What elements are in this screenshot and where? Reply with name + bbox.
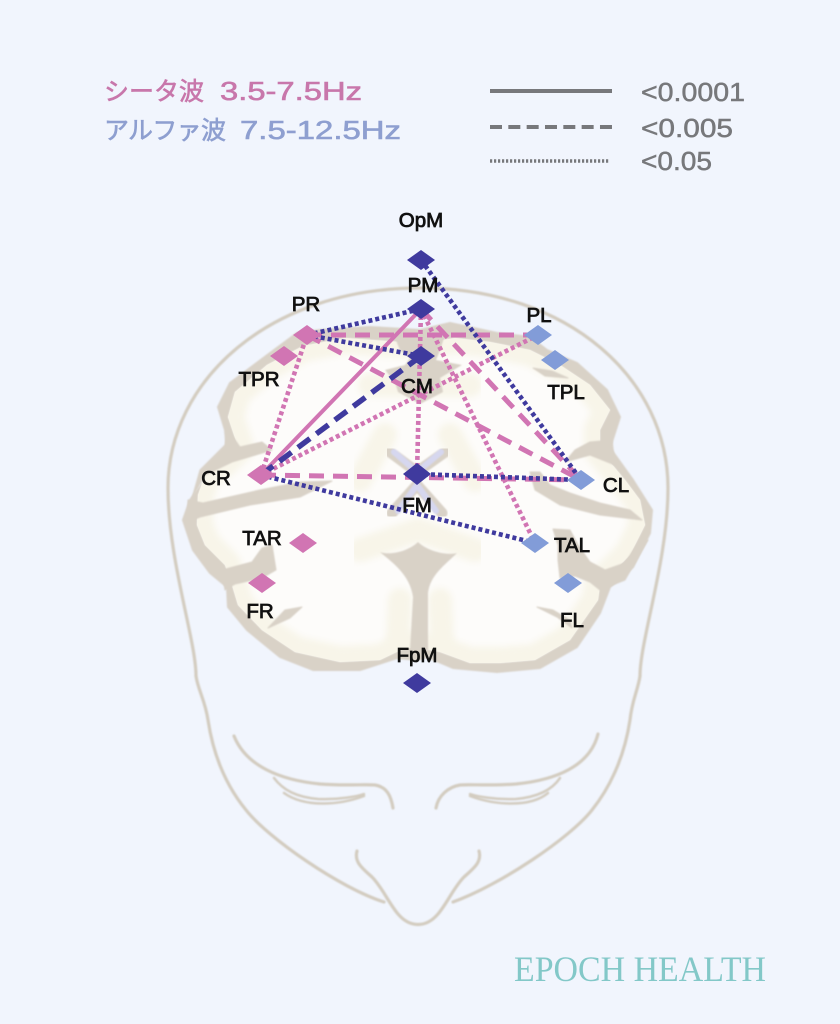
electrode labels: PR — [292, 293, 320, 316]
dashed alpha connection — [261, 356, 421, 475]
electrode labels: TAL — [554, 534, 590, 557]
cortex outer layer — [183, 323, 652, 672]
electrode labels: TPL — [547, 381, 585, 404]
legend: wave bands: シータ波 — [104, 78, 204, 106]
electrode labels: FM — [402, 494, 432, 517]
electrode labels: PM — [408, 274, 438, 297]
electrode labels: FR — [246, 600, 274, 623]
midline electrodes — [403, 250, 435, 693]
logo: EPOCH HEALTH — [514, 949, 766, 989]
legend: wave bands: 7.5-12.5Hz — [240, 115, 401, 145]
dashed theta connections — [261, 309, 581, 480]
dotted theta connections — [261, 309, 538, 543]
electrode labels: PL — [526, 304, 552, 327]
connection lines — [261, 260, 581, 543]
solid theta connection — [261, 309, 421, 475]
electrode labels: CR — [201, 467, 231, 490]
electrode labels: CM — [401, 375, 433, 398]
cream inner rim — [197, 338, 645, 663]
legend: line styles — [490, 91, 612, 161]
dotted alpha connections — [261, 260, 581, 543]
white matter — [197, 338, 645, 663]
electrode labels: FL — [560, 609, 584, 632]
electrode labels: TAR — [242, 527, 282, 550]
brain illustration — [183, 323, 652, 672]
electrode diamonds — [247, 250, 595, 693]
legend: wave bands: 3.5-7.5Hz — [220, 76, 362, 106]
left hemisphere alpha electrodes — [521, 325, 595, 593]
legend: wave bands — [104, 76, 401, 145]
ventricles — [390, 452, 445, 513]
electrode labels: FpM — [396, 644, 438, 667]
midline fold — [380, 542, 457, 650]
electrode labels — [201, 209, 629, 667]
legend: p values — [641, 77, 745, 176]
electrode labels: TPR — [238, 368, 280, 391]
central grey mass — [385, 335, 462, 404]
cortical folds — [188, 368, 648, 628]
right hemisphere theta electrodes — [247, 325, 321, 593]
legend: p values: <0.05 — [641, 146, 712, 176]
legend: p values: <0.0001 — [641, 77, 745, 107]
electrode labels: CL — [603, 474, 629, 497]
head outline — [168, 288, 668, 924]
electrode labels: OpM — [399, 209, 443, 232]
legend: p values: <0.005 — [641, 113, 733, 143]
cream halo around centre — [360, 385, 475, 640]
legend: wave bands: アルファ波 — [104, 117, 226, 145]
